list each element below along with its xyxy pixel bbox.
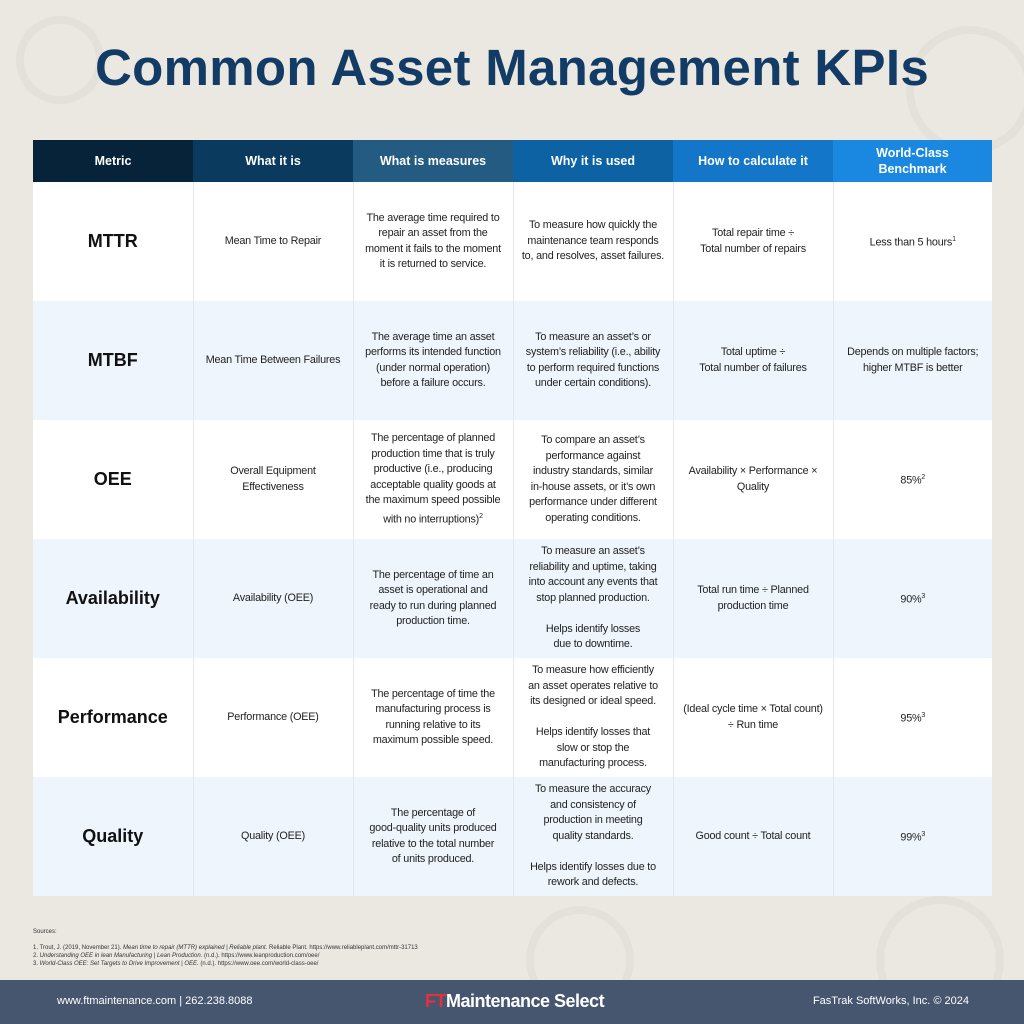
KPI table: relative to the total number — [372, 838, 494, 850]
KPI table: Availability × Performance × — [689, 465, 817, 477]
KPI table: Total number of failures — [699, 362, 807, 374]
KPI table: How to calculate it — [698, 154, 808, 168]
KPI table: higher MTBF is better — [863, 362, 963, 374]
KPI table: Helps identify losses that — [536, 726, 650, 738]
KPI table: quality standards. — [552, 830, 634, 842]
KPI table: to, and resolves, asset failures. — [522, 250, 664, 262]
KPI table: Helps identify losses due to — [530, 861, 656, 873]
KPI table: reliability and uptime, taking — [529, 561, 657, 573]
KPI table: running relative to its — [385, 718, 481, 730]
KPI table: OEE — [94, 469, 132, 489]
KPI table: with no interruptions)2 — [383, 513, 483, 525]
KPI table: Total run time ÷ Planned — [697, 584, 809, 596]
KPI table: industry standards, similar — [533, 465, 653, 477]
KPI table: Mean Time to Repair — [225, 235, 321, 247]
KPI table: Overall Equipment — [230, 465, 316, 477]
KPI table: operating conditions. — [545, 512, 641, 524]
KPI table: production time. — [396, 615, 470, 627]
KPI table — [33, 140, 992, 896]
KPI table: The average time required to — [366, 212, 500, 224]
KPI table: production time that is truly — [371, 448, 495, 460]
KPI table: The percentage of — [391, 806, 475, 818]
KPI table: Availability — [66, 588, 160, 608]
KPI table: What it is — [245, 154, 301, 168]
KPI table: Quality — [82, 826, 143, 846]
KPI table: The percentage of time the — [371, 688, 495, 700]
KPI table: To measure the accuracy — [535, 783, 651, 795]
KPI table: Benchmark — [878, 162, 947, 176]
KPI table: due to downtime. — [553, 638, 633, 650]
KPI table: system’s reliability (i.e., ability — [526, 346, 660, 358]
KPI table: Mean Time Between Failures — [206, 354, 340, 366]
KPI table: stop planned production. — [536, 592, 650, 604]
sources — [33, 928, 418, 967]
KPI table: Depends on multiple factors; — [847, 346, 978, 358]
KPI table: manufacturing process is — [375, 703, 491, 715]
KPI table: performance under different — [529, 496, 657, 508]
KPI table: of units produced. — [392, 853, 474, 865]
KPI table: production time — [718, 600, 788, 612]
KPI table: slow or stop the — [557, 742, 629, 754]
footer — [0, 980, 1024, 1024]
KPI table: good-quality units produced — [369, 822, 497, 834]
KPI table: in-house assets, or it’s own — [531, 480, 655, 492]
KPI table: To measure how efficiently — [532, 664, 654, 676]
KPI table: under certain conditions). — [535, 377, 651, 389]
KPI table: it is returned to service. — [380, 258, 486, 270]
KPI table: 90%3 — [900, 593, 925, 606]
KPI table: World-Class — [876, 146, 949, 160]
KPI table: Quality — [737, 480, 769, 492]
KPI table: To compare an asset’s — [541, 434, 645, 446]
KPI table: acceptable quality goods at — [370, 479, 496, 491]
KPI table: ready to run during planned — [370, 600, 496, 612]
footer: www.ftmaintenance.com | 262.238.8088 — [57, 995, 252, 1007]
KPI table: Total uptime ÷ — [721, 346, 785, 358]
KPI table: Good count ÷ Total count — [696, 830, 810, 842]
KPI table: Quality (OEE) — [241, 830, 305, 842]
logo: FTMaintenance Select — [425, 991, 604, 1011]
KPI table: 85%2 — [900, 474, 925, 487]
KPI table: Total number of repairs — [700, 242, 806, 254]
KPI table: Total repair time ÷ — [712, 227, 794, 239]
KPI table: To measure how quickly the — [529, 219, 657, 231]
KPI table: manufacturing process. — [539, 757, 647, 769]
KPI table: the maximum speed possible — [366, 494, 500, 506]
KPI table: MTBF — [88, 350, 138, 370]
KPI table: The percentage of planned — [371, 432, 495, 444]
KPI table: productive (i.e., producing — [374, 463, 492, 475]
KPI table: The percentage of time an — [372, 568, 494, 580]
KPI table: performs its intended function — [365, 346, 501, 358]
KPI table: To measure an asset’s — [541, 545, 645, 557]
footer: FasTrak SoftWorks, Inc. © 2024 — [813, 995, 969, 1007]
KPI table: performance against — [546, 450, 640, 462]
KPI table: Performance — [58, 707, 168, 727]
sources: 1. Trout, J. (2019, November 21). Mean time to repair (MTTR) explained | Reliable plant. Reliable Plant. https://www.reliableplant.com/mttr-31713 — [33, 945, 418, 951]
KPI table: MTTR — [88, 231, 138, 251]
sources: 2. Understanding OEE in lean Manufacturing | Lean Production. (n.d.). https://www.leanproduction.com/oee/ — [33, 953, 319, 959]
KPI table: and consistency of — [550, 799, 636, 811]
KPI table: 95%3 — [900, 712, 925, 725]
KPI table: to perform required functions — [527, 362, 659, 374]
KPI table: (Ideal cycle time × Total count) — [683, 703, 823, 715]
KPI table: an asset operates relative to — [528, 680, 658, 692]
KPI table: asset is operational and — [378, 584, 488, 596]
title: Common Asset Management KPIs — [95, 39, 929, 96]
sources: 3. World-Class OEE: Set Targets to Drive Improvement | OEE. (n.d.). https://www.oee.com/world-class-oee/ — [33, 961, 318, 967]
KPI table: into account any events that — [529, 576, 657, 588]
KPI table: 99%3 — [900, 831, 925, 844]
KPI table: ÷ Run time — [728, 718, 778, 730]
KPI table: Performance (OEE) — [227, 711, 319, 723]
KPI table: before a failure occurs. — [380, 377, 486, 389]
KPI table: Effectiveness — [242, 480, 304, 492]
sources: Sources: — [33, 929, 57, 935]
KPI table: its designed or ideal speed. — [530, 695, 656, 707]
KPI table: rework and defects. — [548, 876, 638, 888]
KPI table: repair an asset from the — [378, 227, 488, 239]
KPI table: moment it fails to the moment — [365, 242, 501, 254]
KPI table: maintenance team responds — [527, 235, 659, 247]
KPI table: Helps identify losses — [546, 623, 640, 635]
KPI table: To measure an asset’s or — [535, 330, 651, 342]
KPI table: The average time an asset — [372, 330, 494, 342]
KPI table: What is measures — [380, 154, 486, 168]
KPI table: production in meeting — [543, 814, 643, 826]
KPI table: Metric — [95, 154, 131, 168]
KPI table: Availability (OEE) — [233, 592, 313, 604]
KPI table: (under normal operation) — [376, 362, 490, 374]
KPI table: maximum possible speed. — [373, 734, 493, 746]
KPI table: Why it is used — [551, 154, 635, 168]
KPI table: Less than 5 hours1 — [870, 236, 956, 249]
